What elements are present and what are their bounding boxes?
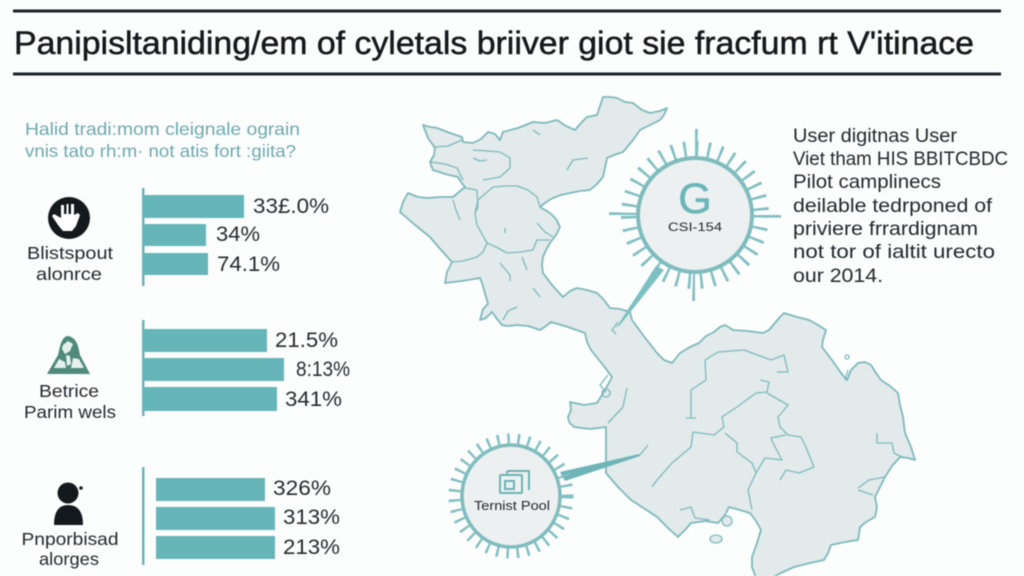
map bbox=[400, 97, 915, 576]
callout label: Ternist Pool bbox=[474, 498, 550, 513]
bar chart: group 2 bbox=[142, 320, 350, 416]
text block: description bbox=[793, 125, 1008, 287]
panel: bar group 3 bbox=[22, 467, 340, 569]
bar chart: group 3: 213% bbox=[283, 536, 340, 559]
icon: person bbox=[54, 482, 83, 525]
icon: hand in black circle bbox=[48, 197, 90, 239]
letter G: G bbox=[678, 175, 712, 223]
label: group 2 bbox=[24, 381, 116, 422]
label: group 1: alonrce bbox=[36, 264, 102, 284]
bar chart: group 1 bbox=[142, 188, 329, 286]
text block: description: Pilot camplinecs bbox=[793, 171, 941, 193]
bar chart: group 3 bbox=[142, 467, 340, 565]
label: group 3: alorges bbox=[39, 549, 99, 569]
text block: description: deilable tedrponed of bbox=[793, 195, 993, 217]
bar chart: group 2: 341% bbox=[285, 388, 342, 411]
icon: green tree emblem bbox=[47, 336, 90, 374]
icon: stacked squares bbox=[500, 471, 529, 493]
label: group 3 bbox=[22, 529, 118, 569]
label: group 1 bbox=[27, 243, 113, 284]
bar chart: group 1: 34% bbox=[216, 223, 260, 246]
callout: Ternist Pool marker bbox=[455, 440, 640, 552]
text block: description: Viet tham HIS BBITCBDC bbox=[793, 148, 1008, 170]
subheading: Halid tradi:mom cleignale ograin bbox=[25, 119, 300, 139]
text block: description: priviere frrardignam bbox=[793, 218, 978, 240]
callout label: CSI-154 bbox=[668, 222, 723, 234]
label: group 2: Betrice bbox=[39, 381, 99, 401]
pointer bbox=[560, 454, 640, 481]
bar chart: group 3: 313% bbox=[283, 506, 340, 529]
title: Panipisltaniding/em of cyletals briiver giot sie fracfum rt V'itinace bbox=[14, 25, 974, 61]
subheading: vnis tato rh:m· not atis fort :giita? bbox=[25, 141, 296, 161]
bar chart: group 1: 74.1% bbox=[217, 253, 280, 276]
bar chart: group 3: 326% bbox=[273, 477, 331, 500]
pointer bbox=[616, 266, 664, 328]
bar chart: group 2: 21.5% bbox=[275, 329, 338, 352]
text block: description: not tor of ialtit urecto bbox=[793, 241, 995, 263]
bar chart: group 2: 8:13% bbox=[296, 358, 350, 381]
label: group 1: Blistspout bbox=[27, 243, 113, 263]
bar chart: group 1: 33£.0% bbox=[253, 195, 329, 218]
panel: bar group 2 bbox=[24, 320, 350, 422]
text block: description: our 2014. bbox=[793, 265, 883, 287]
label: group 2: Parim wels bbox=[24, 402, 116, 422]
text block: description: User digitnas User bbox=[793, 125, 958, 147]
subheading bbox=[25, 119, 300, 161]
panel: bar group 1 bbox=[27, 188, 329, 286]
callout: G marker bbox=[616, 144, 766, 328]
label: group 3: Pnporbisad bbox=[22, 529, 118, 549]
